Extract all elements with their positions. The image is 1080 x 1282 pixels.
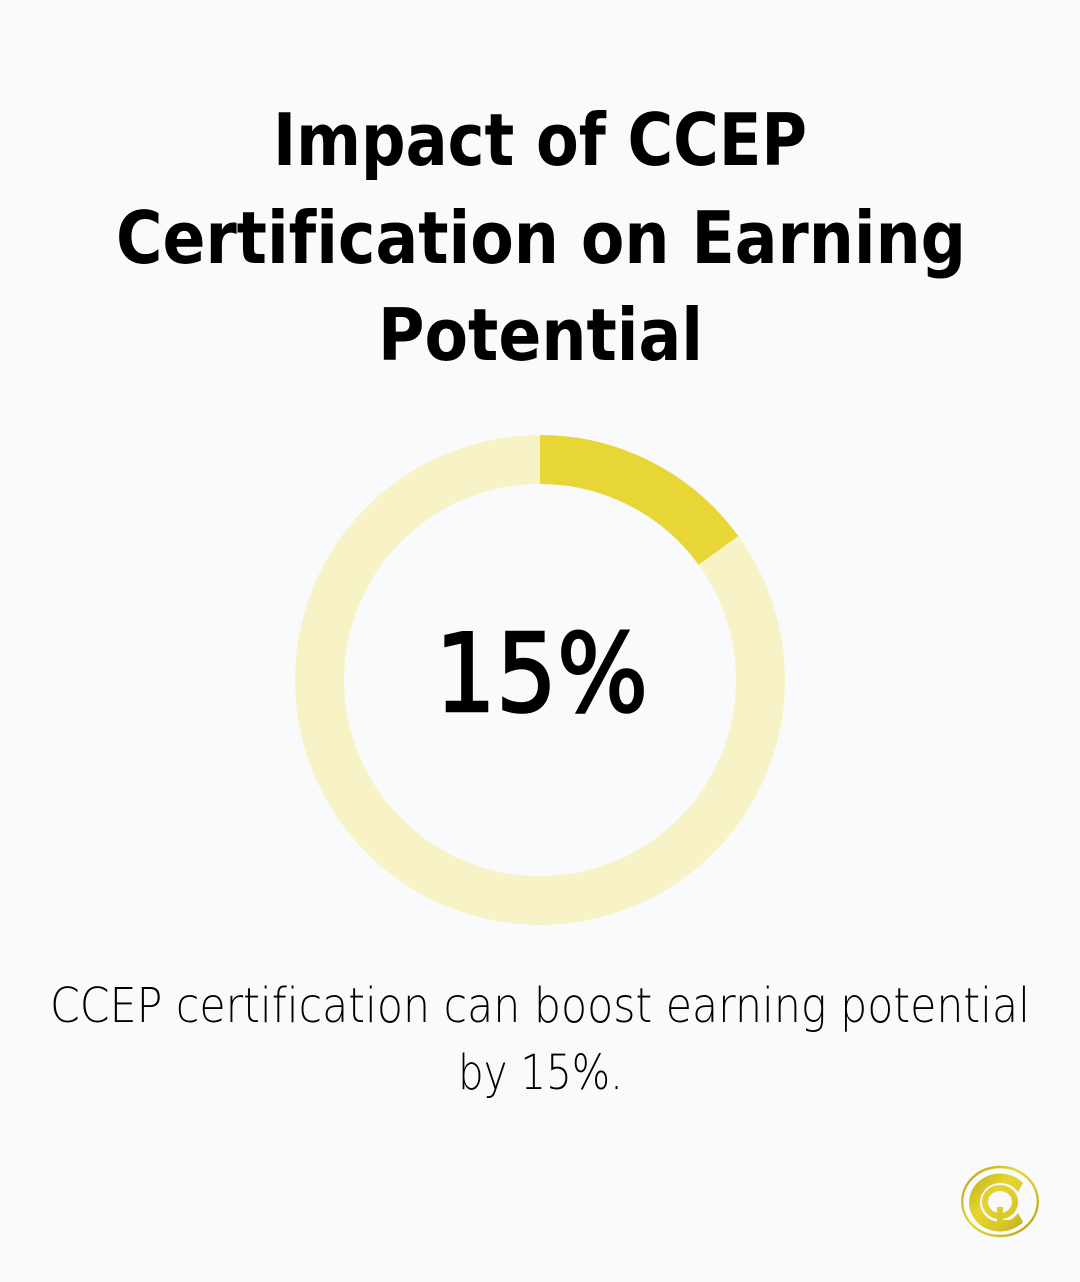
description: by 15%.: [458, 1045, 623, 1101]
description: [50, 978, 1030, 1101]
donut track: [320, 460, 760, 900]
icon: logo: [962, 1167, 1038, 1236]
title: Impact of CCEP: [273, 98, 807, 182]
donut highlighted segment: [540, 460, 718, 550]
title: [116, 98, 966, 377]
title: Certification on Earning: [116, 196, 966, 280]
center value: 15%: [435, 612, 648, 737]
title: Potential: [378, 293, 703, 377]
donut chart: 15%: [320, 460, 760, 900]
